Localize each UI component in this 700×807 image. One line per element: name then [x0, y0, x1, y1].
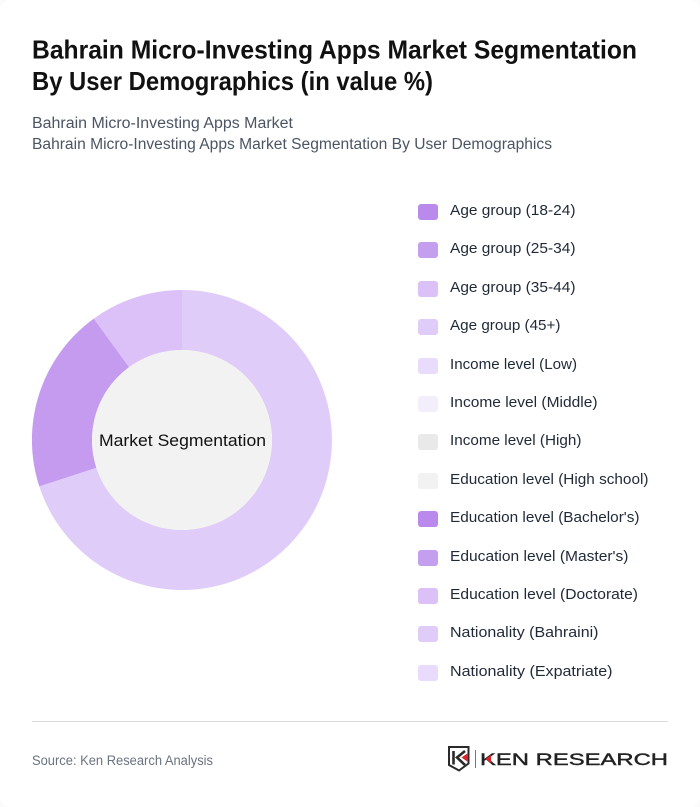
legend item: Income level (Middle): Income level (Middle) — [450, 394, 598, 411]
legend — [418, 202, 648, 681]
legend item: Education level (High school): Education level (High school) — [450, 471, 648, 488]
logo: Ken Research — [449, 747, 668, 770]
donut centre — [92, 350, 272, 530]
source note: Source: Ken Research Analysis — [32, 753, 213, 768]
title: Bahrain Micro-Investing Apps Market Segmentation — [32, 34, 637, 64]
centre label: Market Segmentation — [99, 431, 266, 450]
subtitle: Bahrain Micro-Investing Apps Market — [32, 115, 294, 132]
subtitle — [32, 115, 552, 153]
subtitle: Bahrain Micro-Investing Apps Market Segmentation By User Demographics — [32, 136, 552, 153]
logo wordmark: KEN RESEARCH — [480, 750, 668, 769]
slice: 20 percent — [32, 319, 129, 486]
legend item: Education level (Master's): Education level (Master's) — [450, 548, 628, 565]
legend item: Age group (25-34): Age group (25-34) — [450, 240, 576, 257]
legend item: Nationality (Bahraini): Nationality (Bahraini) — [450, 624, 598, 641]
legend item: Age group (35-44): Age group (35-44) — [450, 279, 576, 296]
logo shield icon — [449, 747, 468, 770]
legend item: Education level (Doctorate): Education level (Doctorate) — [450, 586, 638, 603]
donut chart — [32, 290, 332, 590]
legend item: Income level (High): Income level (High) — [450, 432, 582, 449]
title — [32, 34, 637, 96]
legend item: Education level (Bachelor's): Education level (Bachelor's) — [450, 509, 640, 526]
title: By User Demographics (in value %) — [32, 66, 433, 96]
legend item: Age group (18-24): Age group (18-24) — [450, 202, 576, 219]
slice: 70 percent — [39, 290, 332, 590]
legend item: Income level (Low): Income level (Low) — [450, 356, 577, 373]
slice: 10 percent — [94, 290, 182, 367]
legend item: Age group (45+): Age group (45+) — [450, 317, 560, 334]
legend item: Nationality (Expatriate): Nationality (Expatriate) — [450, 663, 612, 680]
